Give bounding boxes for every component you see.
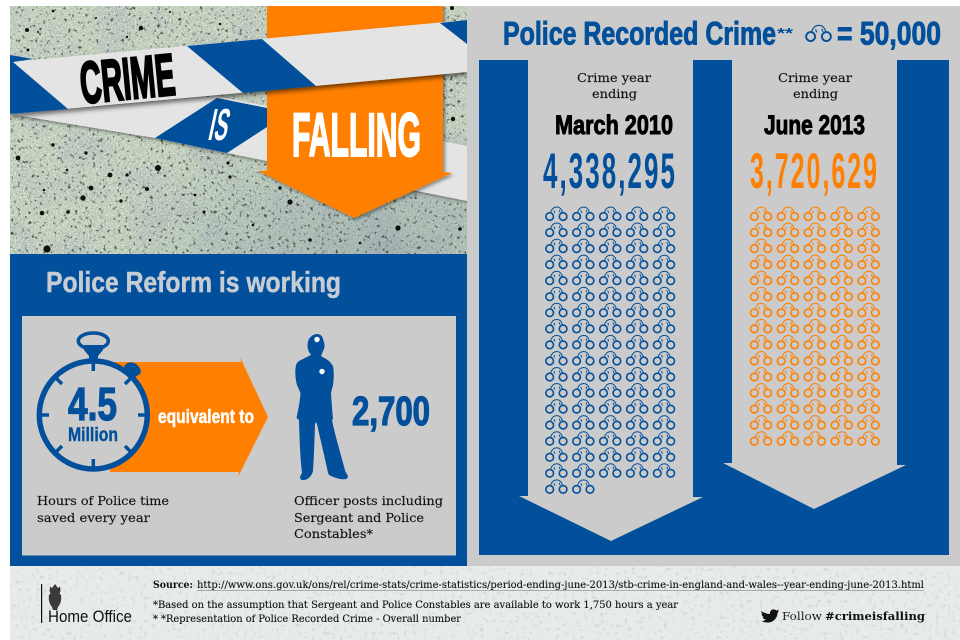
heading: police recorded crime: Police Recorded Crime — [503, 16, 776, 52]
concrete texture background — [10, 6, 467, 254]
footnote stars: ** — [777, 25, 793, 42]
main police tape — [10, 20, 467, 114]
date: June 2013: June 2013 — [764, 110, 865, 140]
word: CRIME: CRIME — [77, 42, 178, 116]
text: hours of police time: saved every year — [37, 510, 150, 525]
text: crime year ending: Crime year — [778, 70, 852, 85]
panel: police reform — [10, 254, 467, 566]
panel: police recorded crime — [467, 6, 960, 566]
arrow: June 2013 — [723, 60, 906, 509]
word: IS: IS — [205, 99, 235, 150]
legend: one handcuff equals 50,000: = 50,000 — [837, 16, 941, 52]
orange down arrow with FALLING: FALLING — [292, 101, 421, 169]
icon: twitter bird — [761, 609, 779, 623]
pictogram: 87 blue handcuffs — [546, 207, 674, 493]
column: June 2013 — [723, 60, 906, 509]
heading: police reform is working: Police Reform is working — [46, 267, 341, 299]
text: follow hashtag: Follow — [782, 609, 822, 623]
pictogram: 75 orange handcuffs — [750, 207, 879, 445]
figure: 4,338,295: 4,338,295 — [543, 143, 677, 199]
text: crime year ending: ending — [592, 86, 637, 101]
text: follow hashtag — [782, 609, 925, 623]
icon: stopwatch with 4.5 Million — [39, 333, 148, 469]
text: officer posts: Officer posts including — [294, 493, 443, 508]
text: crime year ending: ending — [793, 86, 838, 101]
icon: stopwatch with 4.5 Million: Million — [68, 424, 118, 446]
arrow: equivalent to: equivalent to — [158, 407, 254, 428]
text: footnotes: * *Representation of Police Recorded Crime - Overall number — [153, 614, 461, 625]
text: source: http://www.ons.gov.uk/ons/rel/crime-stats/crime-statistics/period-ending-june-2013/stb-crime-in-england-and-wales--year-ending-june-2013.html — [197, 580, 924, 591]
panel: inner grey box — [22, 316, 456, 556]
logo: Home Office: Home Office — [48, 608, 132, 626]
orange down arrow with FALLING — [258, 6, 452, 218]
panel: footer — [10, 566, 960, 640]
text: crime year ending: Crime year — [577, 70, 651, 85]
arrow: equivalent to — [110, 357, 268, 477]
icon: stopwatch with 4.5 Million: 4.5 — [68, 378, 117, 430]
logo: Home Office — [41, 584, 132, 626]
text: follow hashtag: #crimeisfalling — [825, 609, 925, 623]
panel: blue background — [479, 60, 949, 555]
text: footnotes: *Based on the assumption that Sergeant and Police Constables are available to work 1,750 hours a year — [153, 600, 678, 611]
icon: police officer silhouette — [295, 334, 348, 480]
arrow: March 2010 — [519, 60, 703, 541]
panel: crime is falling banner — [10, 6, 467, 254]
lower police tape — [10, 96, 467, 201]
figure: 2,700: 2,700 — [352, 388, 430, 434]
text: officer posts: Sergeant and Police — [294, 510, 424, 525]
column: March 2010 — [519, 60, 703, 541]
text: source: Source: — [153, 580, 193, 591]
date: March 2010: March 2010 — [555, 110, 673, 140]
text: officer posts: Constables* — [294, 526, 374, 541]
legend: one handcuff equals 50,000 — [806, 16, 941, 52]
text: hours of police time: Hours of Police time — [37, 493, 169, 508]
